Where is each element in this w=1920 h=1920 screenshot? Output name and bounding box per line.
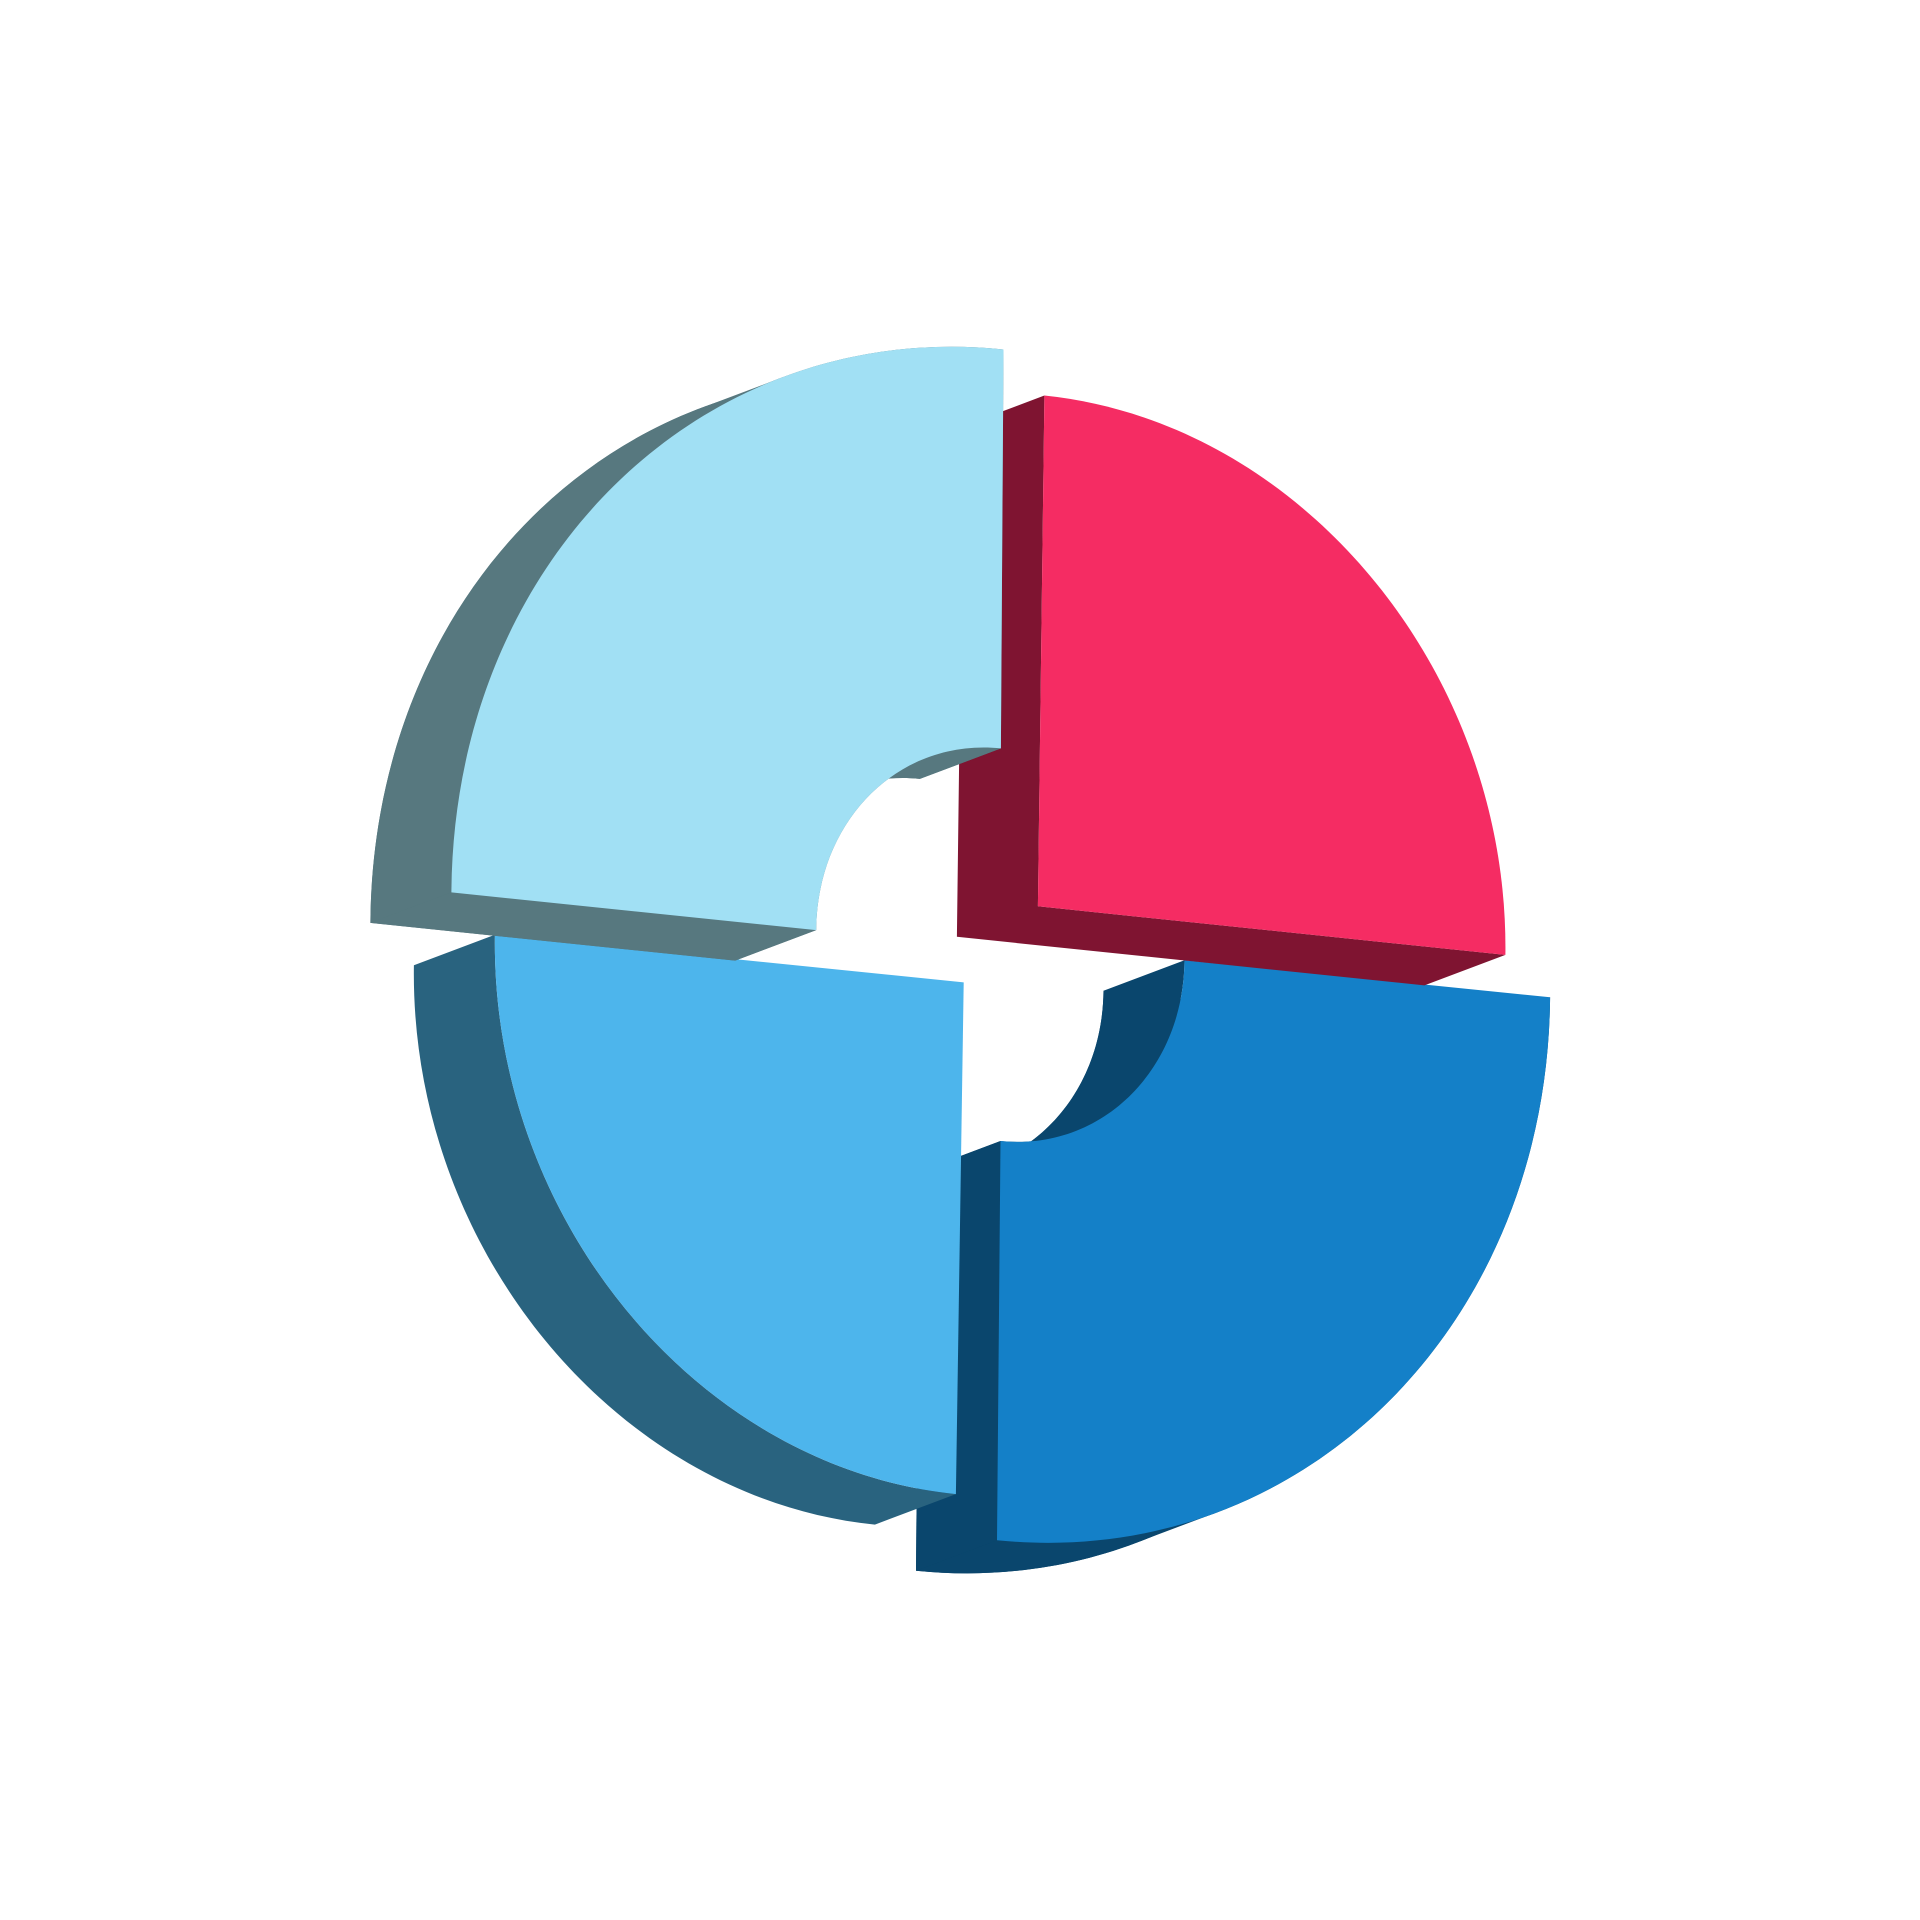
face: dark blue top surface	[997, 960, 1550, 1543]
face: light blue top surface	[451, 347, 1003, 930]
face: medium blue top surface	[495, 935, 964, 1494]
segment: medium blue, bottom left	[414, 935, 964, 1525]
side: pink extrusion	[957, 396, 1505, 985]
segment: light blue, top left	[370, 347, 1003, 961]
side: light blue extrusion	[370, 347, 1003, 961]
face: pink top surface	[1038, 396, 1505, 955]
side: dark blue extrusion	[916, 960, 1550, 1573]
side: medium blue extrusion	[414, 935, 956, 1525]
segment: dark blue, bottom right	[916, 960, 1550, 1573]
segment: pink, top right	[957, 396, 1505, 985]
